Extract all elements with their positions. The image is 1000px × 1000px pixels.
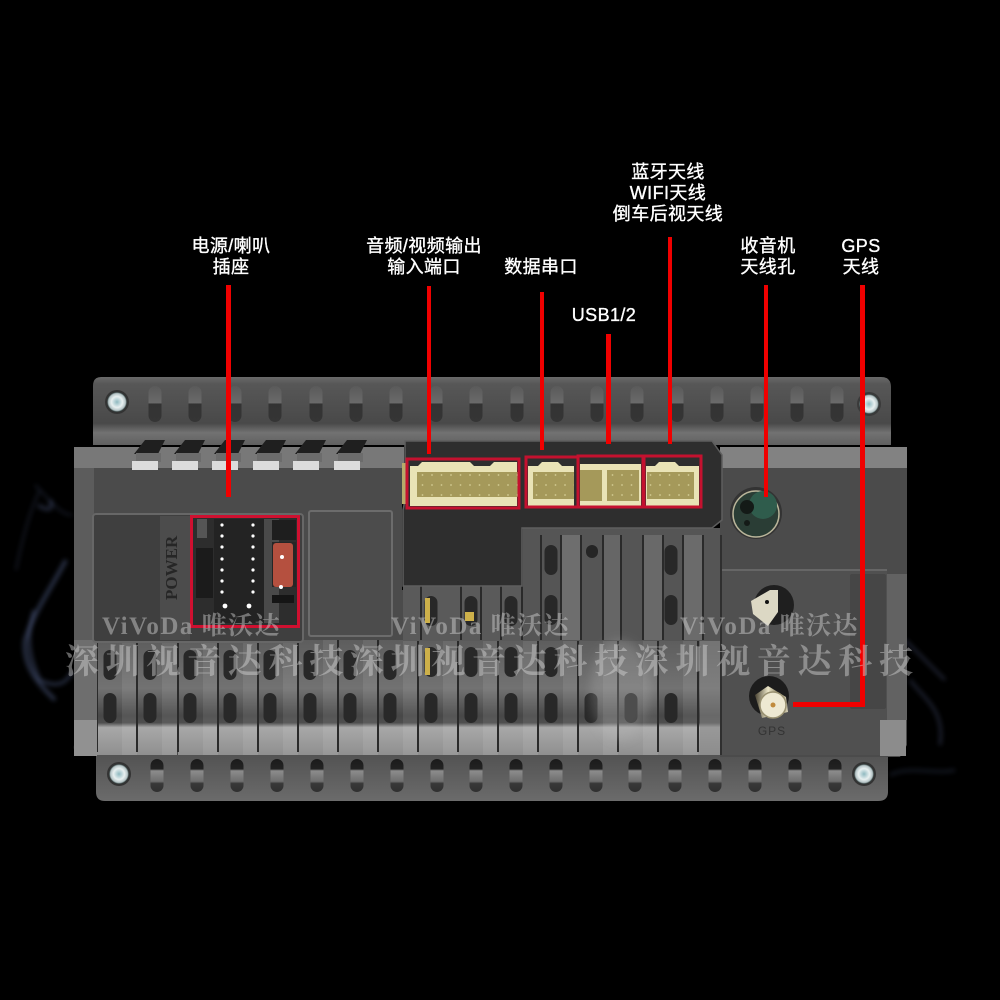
watermark: company name: 深圳视音达科技深圳视音达科技深圳视音达科技 [65,643,920,681]
smoke: right [890,640,955,775]
blank cover plate [309,511,392,636]
bottom ventilation slots [150,759,842,792]
leader line: USB [606,334,611,444]
watermark: ViVoDa: ViVoDa 唯沃达 [391,612,571,640]
connector: data serial [526,457,578,507]
FM connector [751,585,794,626]
leader line: audio video [427,286,431,454]
watermark: ViVoDa: ViVoDa 唯沃达 [102,612,282,640]
leader line: GPS [793,285,862,704]
power recess [93,514,303,642]
smoke haze over chassis [590,640,650,740]
left edge highlight [74,468,94,643]
GPS antenna connector: GPS [758,724,786,738]
bottom mounting plate [96,750,888,801]
body top highlight band left [74,447,404,468]
connector: antenna module [644,456,701,507]
power label panel: POWER [162,535,181,600]
car radio chassis [74,377,907,801]
label: USB: USB1/2 [572,305,636,325]
label: GPS: 天线 [843,257,879,277]
connector: audio video [402,459,519,508]
label: audio video: 输入端口 [387,257,461,277]
leader line: radio antenna [764,285,768,497]
housing slots [104,545,678,723]
label: radio antenna: 天线孔 [740,257,796,277]
label: bluetooth wifi reverse camera: 蓝牙天线 [631,162,705,182]
power and speaker socket [193,518,297,625]
leader line: bluetooth wifi [668,237,672,444]
label: power speaker: 插座 [213,257,249,277]
body top highlight band right [720,447,907,468]
label: GPS: GPS [841,236,881,256]
connector: USB [578,456,643,507]
watermark: ViVoDa [102,612,860,640]
cooling fins [132,440,367,470]
label: bluetooth wifi reverse camera: 倒车后视天线 [613,204,723,224]
power label panel [160,516,190,640]
right lower panel [722,569,907,756]
radio antenna jack [730,487,782,539]
label: bluetooth wifi reverse camera: WIFI天线 [630,183,706,203]
upper rib section below connectors [403,528,722,755]
label: power speaker: 电源/喇叭 [191,236,271,256]
GPS antenna connector [749,676,789,738]
leader line: data serial [540,292,544,450]
connector cavity [403,441,722,586]
label: radio antenna: 收音机 [740,236,796,256]
top mounting plate [93,377,891,445]
watermark: ViVoDa: ViVoDa 唯沃达 [680,612,860,640]
label: data serial: 数据串口 [504,257,578,277]
main body [74,447,907,757]
top ventilation slots [148,386,844,422]
red box: power socket [192,516,298,626]
label: audio video: 音频/视频输出 [366,236,482,256]
lower ribbed housing [74,640,738,756]
leader line: power [226,285,231,497]
smoke: left [16,485,72,700]
mounting screws [105,390,881,786]
